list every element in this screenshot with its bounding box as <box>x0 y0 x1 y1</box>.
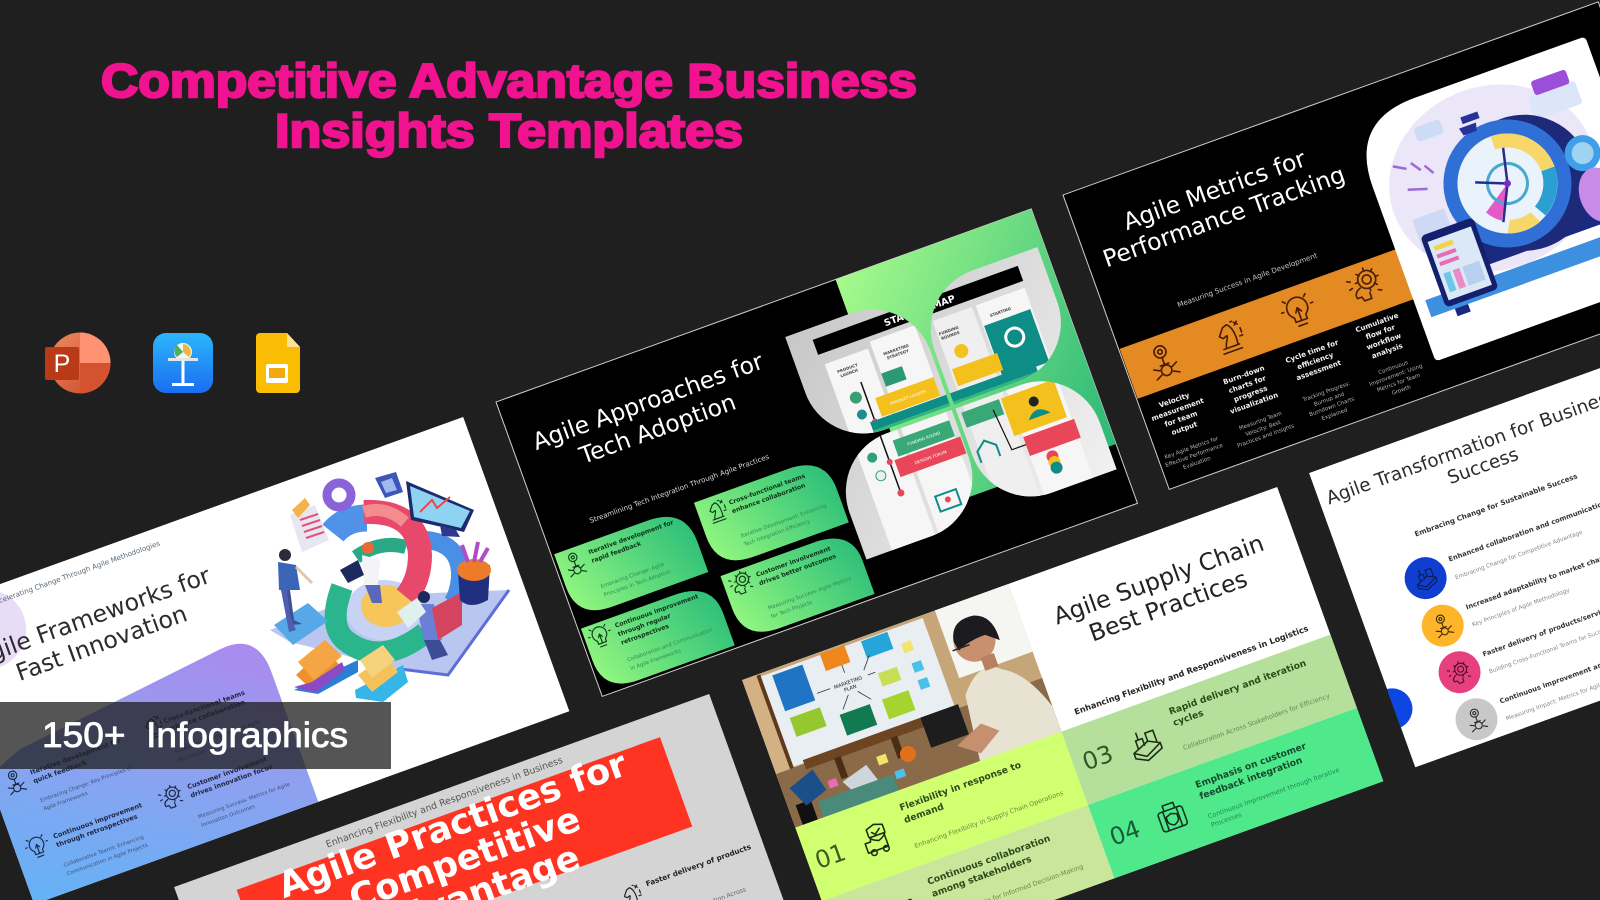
panel: Agile Approaches slide: LAUNCH <box>840 367 859 378</box>
panel: Agile Metrics slide: Burn-down <box>1222 363 1266 386</box>
panel: Agile Frameworks slide: Collaborative Teams: Enhancing <box>63 834 145 869</box>
panel: Agile Frameworks slide: Communication in Agile Projects <box>66 843 149 877</box>
panel: Agile Supply Chain slide: Best Practices <box>1085 565 1251 647</box>
panel: Agile Supply Chain slide: 01 <box>811 838 850 875</box>
panel: Agile Supply Chain slide <box>742 487 1383 900</box>
panel: Agile Transformation slide <box>1309 368 1600 768</box>
panel: Agile Metrics slide: visualization <box>1229 390 1279 416</box>
icon: Keynote <box>153 333 213 393</box>
panel: Agile Frameworks slide: drives innovation focus <box>189 763 274 800</box>
panel: Agile Metrics slide: assessment <box>1295 358 1343 382</box>
illustration: stopwatch dashboard <box>1349 36 1600 361</box>
panel: Agile Metrics slide: Effective Performance <box>1165 443 1224 469</box>
panel: Agile Approaches slide: through regular <box>617 612 673 638</box>
panel: Agile Metrics slide: efficiency <box>1296 350 1335 371</box>
panel: Agile Supply Chain slide: demand <box>903 801 945 826</box>
panel: Agile Approaches slide: in Agile Frameworks <box>630 648 682 672</box>
panel: Agile Metrics slide: output <box>1170 419 1199 437</box>
panel: Agile Supply Chain slide: among stakeholders <box>930 854 1034 900</box>
panel: Agile Approaches slide: Agile Approaches for <box>529 347 767 456</box>
panel: Agile Metrics slide: Tracking Progress: <box>1301 381 1351 404</box>
panel: Agile Supply Chain slide: Rapid delivery and iteration <box>1167 658 1308 718</box>
panel: Agile Metrics slide: Metrics for Team <box>1376 373 1421 394</box>
panel: Agile Approaches slide: DESIGNS FORUM <box>914 449 948 465</box>
panel: Agile Approaches slide: enhance collaboration <box>731 482 806 515</box>
panel: Agile Approaches slide: PRODUCT LAUNCH <box>889 389 926 406</box>
panel: Agile Metrics slide: Velocity: Best <box>1245 420 1282 438</box>
panel: Agile Approaches slide: Cross-functional teams <box>728 473 807 507</box>
panel: Agile Metrics slide: Velocity <box>1158 390 1191 410</box>
panel: Agile Approaches slide: FUNDING ROUND <box>907 430 941 447</box>
panel: Agile Frameworks slide: Iterative development for <box>29 736 123 777</box>
panel: Agile Metrics slide: Agile Metrics for <box>1119 145 1310 236</box>
panel: Agile Practices slide <box>174 694 815 900</box>
panel: Agile Metrics slide: charts for <box>1227 373 1268 395</box>
panel: Agile Metrics slide: workflow <box>1365 331 1403 352</box>
panel: Agile Supply Chain slide: Enhancing Flexibility and Responsiveness in Logistics <box>1073 623 1310 717</box>
icon: PowerPoint: P <box>54 350 70 378</box>
panel: Agile Metrics slide: Measuring Team <box>1238 411 1283 432</box>
panel: Agile Supply Chain slide: Processes <box>1210 811 1243 829</box>
panel: Agile Frameworks slide: quick feedback <box>32 758 88 785</box>
panel: Agile Approaches slide: STRATEGY <box>886 348 909 361</box>
photo: man at marketing plan board: MARKETING <box>833 675 864 691</box>
panel: Agile Supply Chain slide: Agile Supply Chain <box>1050 529 1268 630</box>
panel: Agile Approaches slide: Embracing Change: Agile <box>600 562 665 590</box>
panel: Agile Approaches slide: STARTING <box>989 306 1012 318</box>
panel: Agile Approaches slide: MAP <box>931 293 957 312</box>
panel: Agile Metrics slide: Burnup and <box>1313 392 1345 408</box>
panel: Agile Frameworks slide <box>0 415 569 900</box>
panel: Agile Frameworks slide: Customer involvement <box>186 755 268 791</box>
panel: Agile Approaches slide: FUNDING <box>938 325 959 337</box>
panel: Agile Metrics slide: Improvement: Using <box>1369 363 1423 388</box>
panel: Agile Approaches slide: Collaboration and Communication <box>627 627 714 664</box>
title: Insights Templates <box>275 104 743 157</box>
panel: Agile Frameworks slide: Continuous improvement <box>52 801 143 841</box>
icon: Google Slides <box>256 333 300 393</box>
panel: Agile Supply Chain slide: Flexibility in response to <box>898 760 1023 814</box>
panel: Agile Approaches slide: for Tech Projects <box>770 600 813 620</box>
panel: Agile Approaches slide: Measuring Success: Agile Metrics <box>767 576 853 612</box>
panel: Agile Frameworks slide: Agile Frameworks <box>43 791 89 812</box>
panel: Agile Approaches slide <box>496 209 1138 696</box>
panel: Agile Supply Chain slide: Emphasis on customer <box>1194 741 1308 791</box>
panel: Agile Metrics slide: Explained <box>1321 407 1348 422</box>
panel: Agile Transformation slide: Key Principles of Agile Methodology <box>1471 588 1571 628</box>
panel: Agile Metrics slide: Performance Tracking <box>1099 160 1349 273</box>
panel: Agile Supply Chain slide: Continuous Improvement through Iterative <box>1207 766 1341 821</box>
panel: Agile Approaches slide: Customer involvement <box>755 545 832 579</box>
panel: Agile Metrics slide: flow for <box>1364 322 1397 341</box>
panel: Agile Supply Chain slide: 03 <box>1079 740 1117 776</box>
panel: Agile Frameworks slide: Measuring Success: Metrics for Agile <box>197 782 291 820</box>
panel: Agile Metrics slide: Cumulative <box>1354 311 1400 334</box>
panel: Agile Approaches slide: PRODUCT <box>836 362 859 374</box>
panel: Agile Approaches slide: rapid feedback <box>591 540 643 565</box>
panel: Agile Metrics slide: Cycle time for <box>1284 337 1340 365</box>
photo: man at marketing plan board: PLAN <box>843 684 858 694</box>
illustration: isometric agile ring scene <box>270 472 509 702</box>
panel: Agile Metrics slide: measurement <box>1150 396 1206 423</box>
panel: Agile Metrics slide: Key Agile Metrics for <box>1164 436 1220 461</box>
panel: Agile Approaches slide: ROUNDS <box>940 330 960 341</box>
title: Competitive Advantage Business <box>101 54 917 107</box>
photo: man at marketing plan board <box>742 584 1063 831</box>
panel: Agile Transformation slide: Embracing Change for Sustainable Success <box>1413 471 1579 538</box>
panel: Agile Approaches slide: Iterative development for <box>588 519 675 556</box>
icon: PowerPoint <box>45 332 110 394</box>
panel: Agile Practices slide: Faster delivery of products <box>645 842 752 888</box>
panel: Agile Frameworks slide: Innovation Outcomes <box>201 804 256 829</box>
panel: Agile Approaches slide: Iterative Development: Enhancing <box>740 503 828 540</box>
panel: Agile Approaches slide: Tech Adoption <box>575 388 740 470</box>
panel: Agile Approaches slide: retrospectives <box>620 623 670 647</box>
panel: Agile Metrics slide: Evaluation <box>1182 456 1212 471</box>
panel: Agile Metrics slide: Growth <box>1391 384 1412 397</box>
panel: Agile Frameworks slide: Cross-functional teams <box>163 689 246 725</box>
panel: Agile Frameworks slide: enhance collaboration <box>166 698 246 734</box>
panel: Agile Approaches slide: drives better outcomes <box>758 553 837 587</box>
panel: Agile Supply Chain slide: feedback integration <box>1198 755 1304 802</box>
panel: Agile Frameworks slide: Accelerating Innovation with Agile <box>174 719 261 755</box>
panel: Agile Approaches slide: MARKETING <box>882 343 909 357</box>
panel: Agile Metrics slide: for team <box>1163 409 1199 429</box>
panel: Agile Approaches slide: Streamlining Tech Integration Through Agile Practices <box>588 452 771 525</box>
panel: Agile Approaches slide: Tech Integration Efficiency <box>742 519 811 548</box>
panel: Agile Frameworks slide: Techniques <box>176 748 207 764</box>
panel: Agile Frameworks slide: Embracing Change: Key Principles of <box>40 765 133 804</box>
panel: Agile Frameworks slide: through retrospectives <box>55 812 139 849</box>
panel: Agile Transformation slide: Embracing Change for Competitive Advantage <box>1454 530 1584 581</box>
panel: Agile Practices slide: Enhancing Flexibility and Responsiveness in Business <box>325 755 564 850</box>
panel: Agile Metrics slide <box>1063 2 1600 489</box>
panel: Agile Metrics slide: Measuring Success in Agile Development <box>1176 251 1319 309</box>
panel: Agile Metrics slide: Burndown Charts <box>1309 396 1355 418</box>
panel: Agile Transformation slide: Success <box>1445 444 1522 489</box>
panel: Agile Metrics slide: progress <box>1232 383 1269 404</box>
panel: Agile Metrics slide: analysis <box>1370 341 1404 361</box>
panel: Agile Supply Chain slide: Collaboration Across Stakeholders for Efficiency <box>1182 692 1331 752</box>
badge: 150+ Infographics <box>0 702 391 769</box>
panel: Agile Approaches slide: STARTUP ROAD <box>883 312 917 329</box>
panel: Agile Approaches slide: Continuous improvement <box>614 593 699 630</box>
panel: Agile Supply Chain slide: Enhancing Flexibility in Supply Chain Operations <box>913 789 1065 850</box>
panel: Agile Supply Chain slide: 04 <box>1106 815 1144 851</box>
panel: Agile Supply Chain slide: cycles <box>1172 708 1206 729</box>
title <box>101 54 917 157</box>
badge: 150+ Infographics: 150+ Infographics <box>42 716 348 755</box>
panel: Agile Frameworks slide: Fast Innovation <box>12 599 191 687</box>
panel: Agile Approaches slide: Principles in Tech Adoption <box>603 569 672 599</box>
panel: Agile Metrics slide: Practices and Insights <box>1237 423 1295 449</box>
panel: Agile Supply Chain slide: Continuous collaboration <box>926 833 1052 888</box>
panel: Agile Metrics slide: Continuous <box>1378 360 1409 376</box>
